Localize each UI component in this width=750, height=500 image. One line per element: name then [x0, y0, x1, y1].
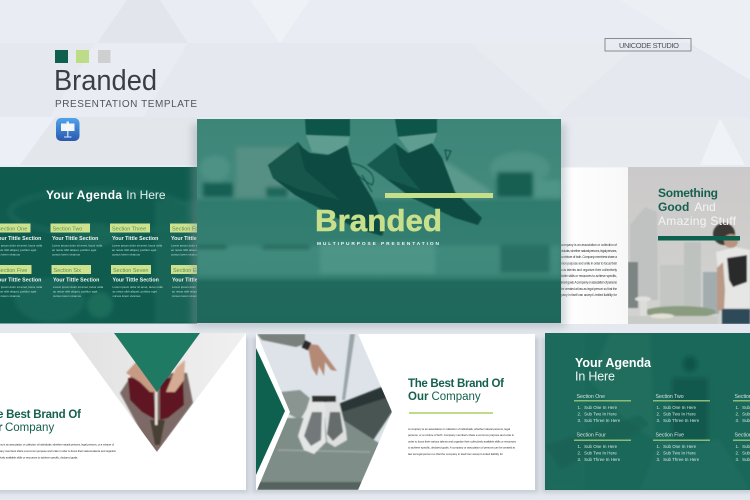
heading: The Best Brand Of — [408, 378, 504, 390]
section column two — [653, 394, 710, 462]
section text row one: cursus lorem vivamus — [112, 252, 141, 256]
colour swatches — [55, 50, 110, 63]
shoes — [268, 119, 482, 236]
section labels row one — [0, 224, 203, 232]
heading — [0, 409, 81, 434]
body text: be created at law as legal person so that the — [561, 287, 617, 291]
section column two: 3. Sub Three In Here — [656, 457, 700, 462]
section column two: 1. Sub One In Here — [656, 444, 697, 449]
photo texture: man on stairs — [648, 335, 709, 440]
panel: company slide right — [561, 167, 750, 324]
section text row two: Lorem ipsum dolor sit amet, lacus nulla — [172, 285, 223, 289]
section text row one: Lorem ipsum dolor sit amet, lacus nulla — [112, 244, 163, 248]
pavement reflection — [197, 246, 561, 276]
studio badge — [605, 38, 691, 51]
section text row one: ac netus nibh aliquet, porttitor eget — [112, 248, 157, 252]
section text row one: Your Tittle Section — [52, 236, 98, 242]
body text: pany in itself can accept Limited liability for — [561, 293, 618, 297]
heading — [575, 356, 652, 384]
body text: company is an association or collection of — [561, 243, 617, 247]
section text row two: ac netus nibh aliquet, porttitor eget — [112, 290, 157, 294]
chevron photo: hanging sneakers — [256, 334, 396, 490]
man — [713, 223, 750, 324]
section text row one: ac netus nibh aliquet, porttitor eget — [171, 248, 216, 252]
green chevron — [256, 348, 285, 475]
section column two: 2. Sub Two In Here — [656, 412, 696, 416]
body text: ilable skills or resources to achieve specific, — [561, 274, 617, 278]
section text row one: cursus lorem vivamus — [171, 252, 200, 256]
section text row two: Your Tittle Section — [172, 278, 218, 284]
section column one: 3. Sub Three In Here — [578, 457, 621, 462]
accent line — [409, 412, 493, 414]
body text: persons, or a mixture of both. Company members share a common purpose and unite in — [408, 433, 514, 437]
section column two: 3. Sub Three In Here — [656, 418, 700, 423]
body text: any members share a common purpose and unite in order to focus their various talents and organize — [0, 449, 116, 453]
body text — [0, 442, 116, 460]
body text: a mixture of both. Company members share a — [561, 255, 617, 259]
subheading: PRESENTATION TEMPLATE — [55, 99, 197, 110]
section column one — [574, 394, 631, 462]
section column two: 1. Sub One In Here — [656, 405, 697, 410]
section column one: 3. Sub Three In Here — [578, 418, 621, 423]
heading: Amazing Stuff — [658, 214, 737, 228]
brand header — [54, 50, 197, 141]
body text — [408, 427, 517, 456]
section column one: 1. Sub One In Here — [578, 444, 618, 449]
photo: city and man — [628, 167, 750, 324]
body text: law as legal person so that the company in itself can accept Limited liability for — [408, 452, 503, 456]
section text row one: Your Tittle Section — [112, 236, 158, 242]
section text row two: cursus lorem vivamus — [172, 294, 201, 298]
title: Branded: Branded — [315, 203, 442, 238]
body text: ively available skills or resources to achieve specific, declared goals. — [0, 456, 78, 460]
section labels row one: Section Four — [172, 226, 203, 232]
panel: bottom right agenda slide — [542, 333, 750, 493]
body text: mon purpose and unite in order to focus their — [561, 262, 618, 266]
section text row one: Lorem ipsum dolor sit amet, lacus nulla — [171, 244, 222, 248]
section text row one: Lorem ipsum dolor sit amet, lacus nulla — [52, 244, 103, 248]
section column three — [733, 394, 750, 462]
section text row two: ac netus nibh aliquet, porttitor eget — [172, 290, 217, 294]
photo texture — [10, 190, 197, 323]
section text row two: ac netus nibh aliquet, porttitor eget — [53, 290, 98, 294]
section labels row two: Section Eight — [173, 268, 206, 274]
section labels row one: Section Two — [52, 226, 82, 232]
heading: Our Company — [408, 391, 481, 403]
panel: bottom left brand slide — [0, 333, 249, 493]
sneakers — [298, 398, 326, 454]
panel: agenda slide left — [0, 167, 197, 324]
triangle photo: hands and bag — [70, 333, 246, 453]
section column one: 1. Sub One In Here — [578, 405, 618, 410]
icon: keynote — [56, 118, 80, 141]
body text: lared goals. A company or association of persons — [561, 280, 617, 284]
section column one: 2. Sub Two In Here — [578, 412, 617, 416]
body text: ous talents and organize their collectively — [561, 268, 617, 272]
section text row one: Your Tittle Section — [171, 236, 217, 242]
bushes — [203, 183, 233, 197]
section column one: Section One — [576, 394, 605, 400]
panel: main cover slide — [192, 119, 566, 328]
cover photo: street and shoes — [197, 119, 561, 276]
accent bar — [658, 236, 740, 240]
section labels row one: Section Three — [112, 226, 146, 232]
section text row two: cursus lorem vivamus — [112, 294, 141, 298]
green triangle — [114, 333, 200, 392]
heading: Your Agenda — [575, 356, 652, 370]
section text row two — [0, 278, 223, 298]
studio badge: UNICODE STUDIO — [619, 41, 679, 50]
section text row one: cursus lorem vivamus — [52, 252, 81, 256]
section column one: 2. Sub Two In Here — [578, 450, 617, 456]
panel: bottom centre sneakers slide — [252, 334, 539, 493]
heading — [658, 186, 737, 228]
arm and hand — [257, 334, 305, 347]
section text row two: Your Tittle Section — [53, 278, 99, 284]
heading: Something — [658, 186, 718, 200]
body text: order to focus their various talents and organize their collectively available skills or resources — [408, 440, 517, 444]
subtitle: MULTIPURPOSE PRESENTATION — [317, 241, 440, 247]
heading: Branded: Branded — [54, 65, 157, 97]
section column two: 2. Sub Two In Here — [656, 450, 696, 456]
body text — [561, 243, 618, 297]
section text row one: ac netus nibh aliquet, porttitor eget — [52, 248, 97, 252]
section column one: Section Four — [576, 432, 606, 438]
section text row one — [0, 236, 222, 256]
section text row two: cursus lorem vivamus — [53, 294, 82, 298]
section labels row two — [0, 265, 206, 274]
section labels row two: Section Seven — [113, 268, 148, 274]
section column two: Section Two — [656, 394, 684, 400]
heading: Your Agenda In Here — [46, 188, 166, 202]
section text row two: Your Tittle Section — [112, 278, 159, 284]
body text: viduals, whether natural persons, legal persons, — [561, 249, 617, 253]
accent bar — [385, 193, 493, 198]
section text row two: Lorem ipsum dolor sit amet, lacus nulla — [53, 285, 104, 289]
body text: to achieve specific, declared goals. A company or association of persons can be created at — [408, 446, 515, 450]
body text: ny is an association or collection of individuals, whether natural persons, legal persons, or a mixture of — [0, 442, 114, 446]
heading: Good And — [658, 200, 716, 214]
section labels row two: Section Six — [54, 268, 81, 274]
heading — [408, 378, 504, 403]
section column two: Section Five — [656, 432, 684, 438]
body text: A company is an association or collection of individuals, whether natural persons, legal — [408, 427, 510, 431]
section text row two: Lorem ipsum dolor sit amet, lacus nulla — [112, 285, 163, 289]
heading: In Here — [575, 370, 615, 384]
